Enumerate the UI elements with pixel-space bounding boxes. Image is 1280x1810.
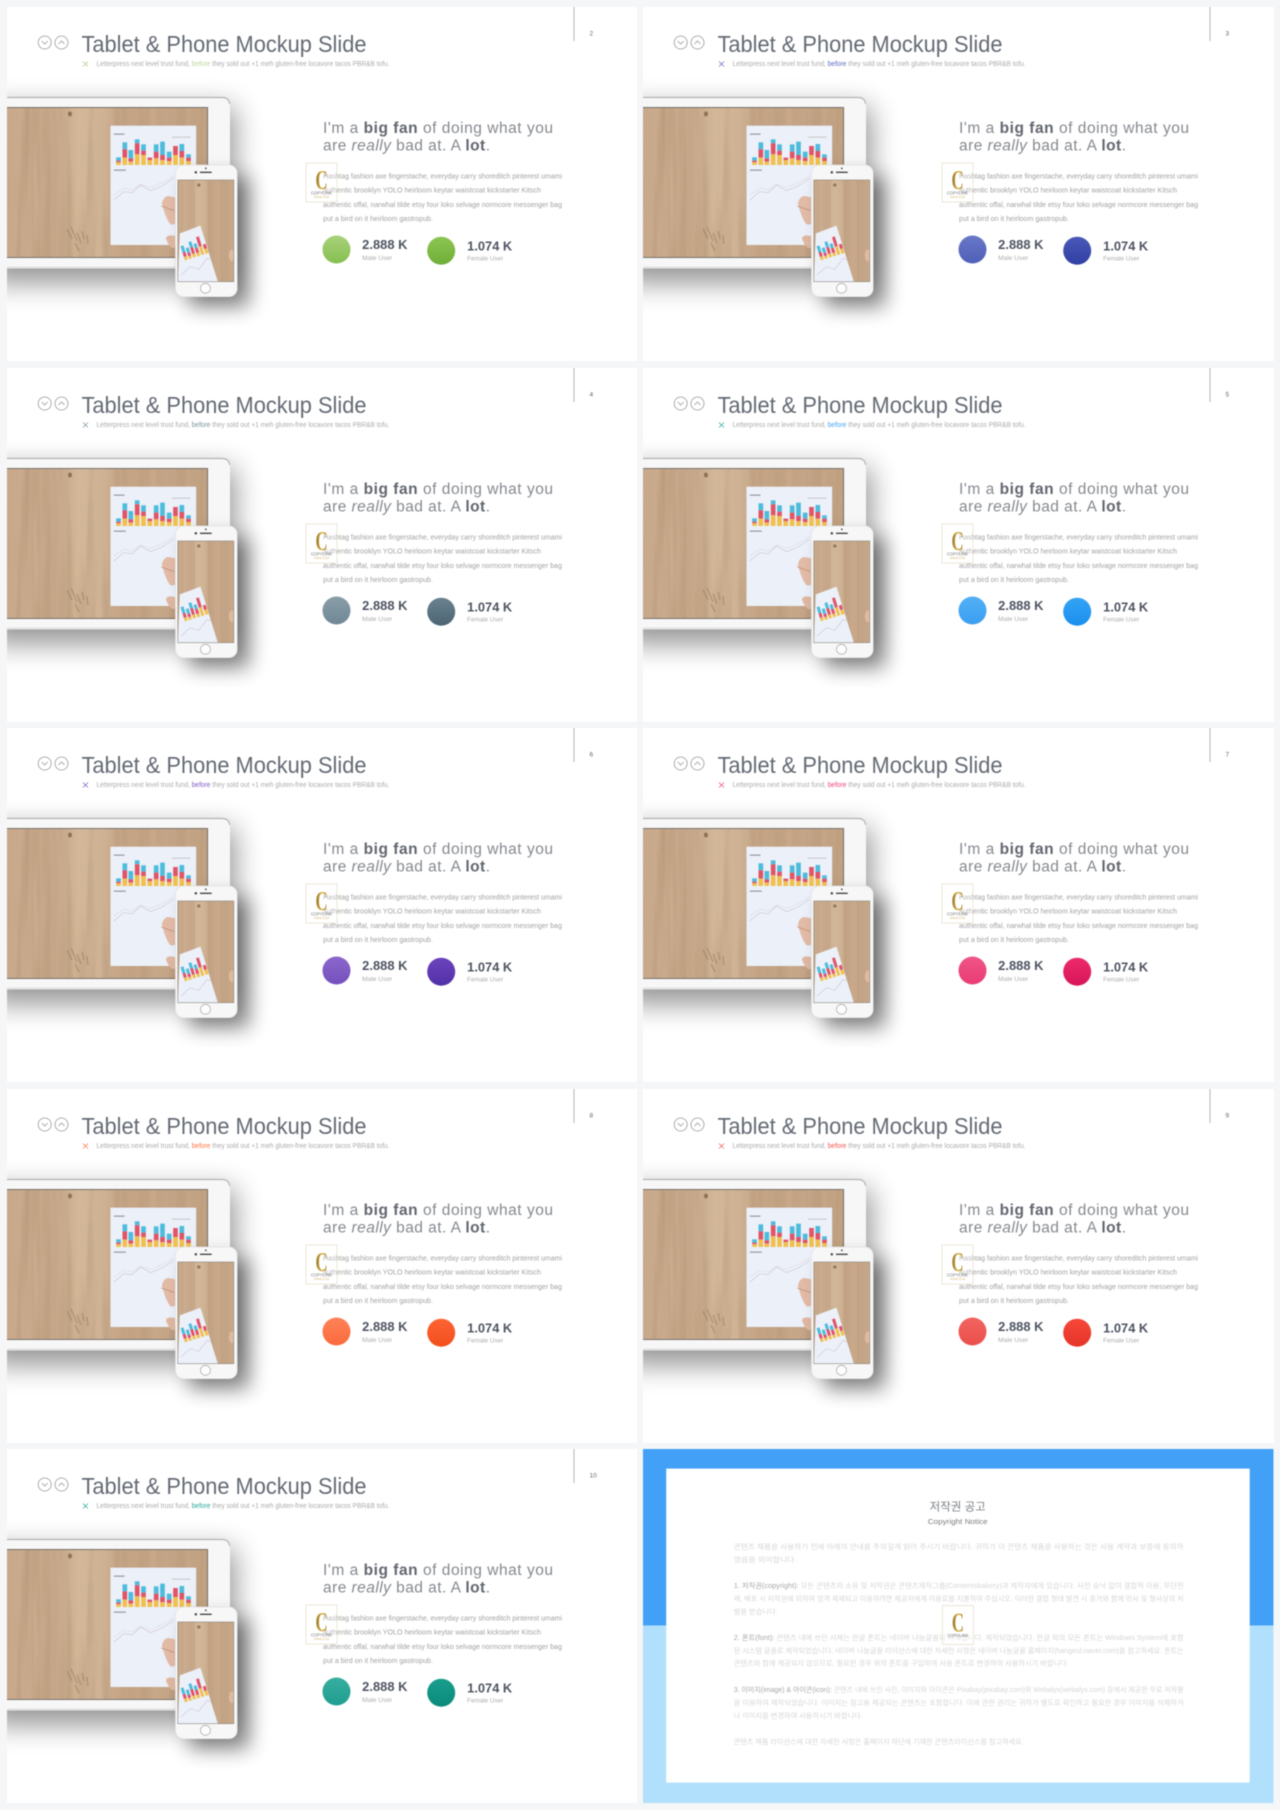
notice heading [928, 1501, 988, 1526]
phone mockup [175, 886, 248, 1028]
stat: male user: 2.888 K [998, 238, 1044, 252]
headline [322, 481, 552, 515]
header icons [674, 36, 704, 49]
stat: female user: Female User [467, 1337, 503, 1344]
headline: I'm a big fan of doing what you [322, 481, 552, 498]
watermark [306, 524, 336, 563]
body text: authentic brooklyn YOLO heirloom keytar waistcoat kickstarter Kitsch [959, 188, 1177, 195]
body text: authentic offal, narwhal tilde etsy four loko selvage normcore messenger bag [322, 562, 562, 569]
stat: male user: 2.888 K [362, 1680, 407, 1694]
stat: male user: Male User [362, 616, 392, 623]
white notice card [666, 1469, 1250, 1783]
watermark [942, 884, 973, 923]
watermark: WWW.COM [313, 556, 329, 560]
header icons [674, 1118, 704, 1131]
body text: Hashtag fashion axe fingerstache, everyday carry shoreditch pinterest umami [322, 534, 562, 541]
headline: are really bad at. A lot. [959, 1219, 1126, 1236]
body text: authentic brooklyn YOLO heirloom keytar waistcoat kickstarter Kitsch [959, 909, 1177, 916]
watermark [942, 524, 973, 563]
headline [959, 1202, 1189, 1236]
body text: authentic brooklyn YOLO heirloom keytar waistcoat kickstarter Kitsch [322, 1269, 541, 1276]
watermark: COPYLINK [310, 912, 332, 917]
title: Tablet & Phone Mockup Slide [81, 31, 366, 57]
blue frame [643, 1449, 1274, 1803]
body text: Hashtag fashion axe fingerstache, everyday carry shoreditch pinterest umami [959, 534, 1199, 541]
title: Tablet & Phone Mockup Slide [718, 752, 1003, 778]
page number [574, 1449, 597, 1483]
subtitle: Letterpress next level trust fund, before they sold out +1 meh gluten-free locavore tacos PBR&B tofu. [96, 61, 389, 68]
page number: 10 [589, 1473, 597, 1480]
body text: authentic brooklyn YOLO heirloom keytar waistcoat kickstarter Kitsch [322, 548, 541, 555]
body text [322, 1255, 562, 1305]
page number [574, 728, 593, 762]
slide 4: blue grey [6, 368, 637, 722]
body text: Hashtag fashion axe fingerstache, everyday carry shoreditch pinterest umami [959, 895, 1199, 902]
stat: female user [427, 597, 512, 625]
headline: I'm a big fan of doing what you [959, 841, 1189, 858]
stat: female user: 1.074 K [467, 600, 512, 614]
subtitle: Letterpress next level trust fund, before they sold out +1 meh gluten-free locavore tacos PBR&B tofu. [733, 422, 1026, 429]
stat: male user: Male User [362, 1337, 392, 1344]
section 1: copyright: 벌을 받습니다. [734, 1607, 778, 1616]
headline: are really bad at. A lot. [322, 498, 490, 515]
slide 2: green [6, 7, 637, 361]
stat: male user: 2.888 K [362, 1320, 407, 1334]
stat: female user: Female User [1103, 977, 1139, 984]
phone mockup [812, 886, 885, 1028]
headline [322, 120, 552, 154]
body text: put a bird on it heirloom gastropub. [322, 216, 433, 223]
body text: authentic brooklyn YOLO heirloom keytar waistcoat kickstarter Kitsch [322, 909, 541, 916]
watermark: C [952, 165, 964, 195]
body text: authentic offal, narwhal tilde etsy four loko selvage normcore messenger bag [959, 1284, 1198, 1291]
stat: female user: Female User [1103, 1337, 1139, 1344]
watermark: COPYLINK [947, 1272, 969, 1277]
section 1: copyright: 재, 배포 시 저작권에 의하여 엄격 제재되고 이용하려면 제공자에게 이용료를 지불하여 주십시오. 이러한 결합 형태 발견 시 증거와 함께 민사 및 형사상의 처 [734, 1594, 1184, 1603]
page number: 3 [1226, 30, 1230, 38]
tablet mockup [623, 1179, 871, 1365]
phone mockup [175, 1247, 248, 1389]
subtitle: Letterpress next level trust fund, before they sold out +1 meh gluten-free locavore tacos PBR&B tofu. [96, 782, 389, 789]
headline: I'm a big fan of doing what you [322, 120, 552, 137]
watermark: WWW.COM [950, 556, 966, 560]
watermark: C [315, 886, 327, 916]
stat: male user: Male User [998, 1337, 1028, 1344]
subtitle: Letterpress next level trust fund, before they sold out +1 meh gluten-free locavore tacos PBR&B tofu. [96, 1143, 389, 1150]
title: Tablet & Phone Mockup Slide [718, 392, 1003, 418]
subtitle: Letterpress next level trust fund, before they sold out +1 meh gluten-free locavore tacos PBR&B tofu. [733, 61, 1026, 68]
stat: female user: 1.074 K [467, 240, 512, 254]
stat: male user [322, 1678, 407, 1706]
slide 7: pink [643, 728, 1274, 1082]
title: Tablet & Phone Mockup Slide [81, 392, 366, 418]
header icons [38, 757, 68, 770]
header icons [38, 1478, 68, 1491]
tablet mockup [0, 97, 234, 283]
body text: put a bird on it heirloom gastropub. [959, 216, 1069, 223]
watermark: WWW.COM [313, 916, 329, 920]
tablet mockup [0, 1179, 234, 1365]
stat: male user: 2.888 K [362, 238, 407, 252]
icon: cross [719, 62, 724, 66]
icon: cross [82, 422, 88, 427]
page number: 8 [589, 1112, 593, 1119]
phone mockup [175, 1607, 248, 1749]
stat: male user [959, 596, 1044, 624]
phone mockup [175, 165, 248, 307]
stat: female user: 1.074 K [467, 1682, 512, 1696]
intro paragraph [734, 1542, 1185, 1564]
tablet mockup [0, 458, 234, 644]
headline [322, 1202, 552, 1236]
section 3: image and icon: 3. 이미지(image) & 아이콘(icon): 콘텐츠 내에 쓰인 사진, 이미지와 아이콘은 Pixabay(pixabay.com)와 Webalys(webalys.com) 등에서 제공한 무료 저작물 [734, 1685, 1185, 1694]
body text: put a bird on it heirloom gastropub. [322, 1658, 433, 1665]
stat: female user [1063, 597, 1148, 625]
headline: I'm a big fan of doing what you [322, 1202, 552, 1219]
icon: cross [82, 62, 88, 66]
section 2: font: 2. 폰트(font): 콘텐츠 내에 쓰인 서체는 한글 폰트는 네이버 나눔글꼴의 서체입니다. 제작되었습니다. 한글 외의 모든 폰트는 Windows System에 포함 [734, 1633, 1185, 1642]
body text [959, 174, 1199, 223]
header icons [674, 397, 704, 410]
headline: are really bad at. A lot. [959, 859, 1126, 876]
watermark [306, 1605, 336, 1644]
tablet mockup [0, 818, 234, 1004]
stat: male user [959, 957, 1044, 985]
title: Tablet & Phone Mockup Slide [718, 1113, 1003, 1139]
watermark [942, 163, 973, 202]
page number [1210, 1089, 1230, 1123]
body text: put a bird on it heirloom gastropub. [959, 937, 1069, 944]
phone mockup [812, 526, 885, 668]
tablet mockup [623, 458, 871, 644]
headline: I'm a big fan of doing what you [322, 1562, 552, 1579]
page number: 2 [589, 30, 593, 38]
stat: female user: Female User [467, 616, 503, 623]
body text: authentic brooklyn YOLO heirloom keytar waistcoat kickstarter Kitsch [322, 1630, 541, 1637]
subtitle: Letterpress next level trust fund, before they sold out +1 meh gluten-free locavore tacos PBR&B tofu. [733, 782, 1026, 789]
headline [959, 120, 1189, 154]
headline: I'm a big fan of doing what you [322, 841, 552, 858]
subtitle: Letterpress next level trust fund, before they sold out +1 meh gluten-free locavore tacos PBR&B tofu. [733, 1143, 1026, 1150]
stat: female user [427, 1318, 512, 1346]
stat: female user: 1.074 K [1103, 600, 1148, 614]
slide 10: teal [6, 1449, 637, 1803]
title: Tablet & Phone Mockup Slide [81, 752, 366, 778]
body text: authentic offal, narwhal tilde etsy four loko selvage normcore messenger bag [959, 202, 1198, 209]
stat: male user: 2.888 K [362, 959, 407, 973]
stat: male user [322, 236, 407, 264]
page number: 5 [1226, 391, 1230, 398]
watermark [943, 1606, 974, 1645]
icon: cross [82, 783, 88, 788]
headline: I'm a big fan of doing what you [959, 120, 1189, 137]
icon: cross [719, 1143, 724, 1148]
stat: male user [959, 1317, 1044, 1345]
body text [959, 534, 1199, 584]
phone mockup [812, 165, 885, 307]
stat: male user: 2.888 K [998, 959, 1044, 973]
slide 6: purple [6, 728, 637, 1082]
closing line: 콘텐츠 제품 라이선스에 대한 자세한 사항은 홈페이지 하단에 기재한 콘텐츠라이선스를 참고하세요. [734, 1737, 1024, 1746]
headline [959, 481, 1189, 515]
watermark: C [315, 526, 327, 556]
body text: put a bird on it heirloom gastropub. [322, 937, 433, 944]
page number: 4 [589, 391, 593, 398]
watermark [306, 163, 336, 202]
headline: are really bad at. A lot. [322, 138, 490, 154]
slide 3: indigo [643, 7, 1274, 361]
watermark [306, 884, 336, 923]
page number [574, 7, 593, 41]
header icons [38, 1118, 68, 1131]
page number [574, 368, 593, 402]
body text: Hashtag fashion axe fingerstache, everyday carry shoreditch pinterest umami [959, 1255, 1199, 1262]
subtitle: Letterpress next level trust fund, before they sold out +1 meh gluten-free locavore tacos PBR&B tofu. [96, 422, 389, 429]
watermark [942, 1245, 973, 1284]
headline: are really bad at. A lot. [959, 138, 1126, 154]
body text: Hashtag fashion axe fingerstache, everyday carry shoreditch pinterest umami [322, 174, 562, 180]
headline: I'm a big fan of doing what you [959, 1202, 1189, 1219]
watermark: C [952, 886, 964, 916]
stat: female user: 1.074 K [467, 1321, 512, 1335]
subtitle: Letterpress next level trust fund, before they sold out +1 meh gluten-free locavore tacos PBR&B tofu. [96, 1503, 389, 1510]
body text: authentic offal, narwhal tilde etsy four loko selvage normcore messenger bag [959, 923, 1198, 930]
slide 5: blue [643, 368, 1274, 722]
headline [322, 1562, 552, 1597]
page number [1210, 728, 1230, 762]
phone mockup [175, 526, 248, 668]
page number: 7 [1226, 752, 1230, 759]
body text [959, 1255, 1199, 1305]
stat: female user [1063, 1318, 1148, 1346]
stat: female user: 1.074 K [1103, 240, 1148, 254]
section 2: font: 된 시스템 글꼴로 제작되었습니다. 네이버 나눔글꼴 라이선스에 대한 자세한 사항은 네이버 나눔글꼴 홈페이지(hangeul.naver.com)를 참고하세요. 폰트는 [734, 1646, 1185, 1655]
body text: authentic offal, narwhal tilde etsy four loko selvage normcore messenger bag [322, 1644, 562, 1651]
headline: are really bad at. A lot. [959, 498, 1126, 515]
section 3: image and icon: 을 이용하여 제작되었습니다. 이미지는 참고용 제공되는 콘텐츠는 포함합니다. 이에 관한 권리는 귀하가 별도로 확인하고 필요한 경우 이미지를 삭제하거 [734, 1698, 1184, 1707]
stat: female user: Female User [467, 256, 503, 262]
body text: authentic offal, narwhal tilde etsy four loko selvage normcore messenger bag [322, 923, 562, 930]
stat: female user: Female User [1103, 616, 1139, 623]
watermark: COPYLINK [947, 551, 969, 556]
headline [959, 841, 1189, 876]
body text: put a bird on it heirloom gastropub. [959, 577, 1069, 584]
body text: authentic brooklyn YOLO heirloom keytar waistcoat kickstarter Kitsch [959, 1269, 1177, 1276]
watermark: C [315, 1607, 327, 1637]
body text: authentic offal, narwhal tilde etsy four loko selvage normcore messenger bag [322, 1284, 562, 1291]
watermark: C [315, 165, 327, 195]
stat: female user: Female User [1103, 256, 1139, 262]
watermark: COPYLINK [948, 1633, 969, 1638]
body text [322, 1616, 562, 1665]
headline [322, 841, 552, 876]
page number [1210, 7, 1230, 41]
stat: male user: Male User [362, 976, 392, 983]
watermark: C [952, 1608, 964, 1638]
section 3: image and icon: 나 이미지를 변경하여 사용하시기 바랍니다. [734, 1711, 863, 1720]
body text [322, 174, 562, 223]
body text: put a bird on it heirloom gastropub. [322, 577, 433, 584]
stat: male user: Male User [998, 616, 1028, 623]
title: Tablet & Phone Mockup Slide [81, 1473, 366, 1499]
body text: Hashtag fashion axe fingerstache, everyday carry shoreditch pinterest umami [322, 895, 562, 902]
watermark: COPYLINK [947, 912, 969, 917]
section 3: image and icon [734, 1685, 1185, 1720]
tablet mockup [623, 97, 871, 283]
stat: female user: 1.074 K [1103, 1321, 1148, 1335]
watermark: WWW.COM [950, 195, 966, 199]
watermark: COPYLINK [947, 190, 969, 196]
headline: I'm a big fan of doing what you [959, 481, 1189, 498]
section 1: copyright [734, 1581, 1184, 1616]
intro paragraph: 콘텐츠 제품을 사용하기 전에 아래의 안내를 주의깊게 읽어 주시기 바랍니다. 귀하가 이 콘텐츠 제품을 사용하는 것은 사용 계약과 보증에 동의하 [734, 1542, 1185, 1551]
body text: authentic offal, narwhal tilde etsy four loko selvage normcore messenger bag [959, 562, 1198, 569]
icon: cross [719, 783, 724, 788]
title: Tablet & Phone Mockup Slide [718, 31, 1003, 57]
section 2: font: 콘텐츠와 함께 제공되지 않으므로, 필요한 경우 위의 폰트를 구입하여 사용 폰트로 변경하여 사용하시기 바랍니다. [734, 1659, 1069, 1668]
stat: male user [322, 596, 407, 624]
body text: authentic offal, narwhal tilde etsy four loko selvage normcore messenger bag [322, 202, 562, 209]
stat: male user: Male User [362, 1697, 392, 1704]
icon: cross [82, 1504, 88, 1509]
title: Tablet & Phone Mockup Slide [81, 1113, 366, 1139]
headline: are really bad at. A lot. [322, 1219, 490, 1236]
stat: female user [427, 958, 512, 986]
headline: are really bad at. A lot. [322, 859, 490, 876]
page number: 6 [589, 752, 593, 759]
notice heading: Copyright Notice [928, 1517, 988, 1526]
tablet mockup [0, 1539, 234, 1725]
section 2: font [734, 1633, 1185, 1668]
body text: authentic brooklyn YOLO heirloom keytar waistcoat kickstarter Kitsch [959, 548, 1177, 555]
stat: male user: Male User [998, 976, 1028, 983]
stat: male user [959, 236, 1044, 264]
body text: Hashtag fashion axe fingerstache, everyday carry shoreditch pinterest umami [322, 1255, 562, 1262]
page number: 9 [1226, 1112, 1230, 1119]
watermark [306, 1245, 336, 1284]
watermark: C [952, 1247, 964, 1277]
header icons [674, 757, 704, 770]
watermark: COPYLINK [310, 1633, 332, 1638]
stat: female user: 1.074 K [467, 961, 512, 975]
body text: put a bird on it heirloom gastropub. [959, 1298, 1069, 1305]
section 1: copyright: 1. 저작권(copyright): 모든 콘텐츠의 소유 및 저작권은 콘텐츠제작그룹(Contentsbakery)과 제작자에게 있습니다. 사전 승낙 없이 결합적 이용, 무단전 [734, 1581, 1184, 1590]
watermark: COPYLINK [310, 1272, 332, 1277]
header icons [38, 36, 68, 49]
body text: put a bird on it heirloom gastropub. [322, 1298, 433, 1305]
watermark: WWW.COM [313, 1277, 329, 1281]
header icons [38, 397, 68, 410]
body text: authentic brooklyn YOLO heirloom keytar waistcoat kickstarter Kitsch [322, 188, 541, 195]
icon: cross [82, 1143, 88, 1148]
stat: male user: Male User [998, 255, 1028, 262]
watermark: WWW.COM [950, 1277, 966, 1281]
watermark: C [315, 1247, 327, 1277]
watermark: WWW.COM [950, 916, 966, 920]
stat: female user: 1.074 K [1103, 961, 1148, 975]
icon: cross [719, 422, 724, 427]
stat: female user: Female User [467, 977, 503, 984]
stat: female user [1063, 237, 1148, 265]
tablet mockup [623, 818, 871, 1004]
watermark: WWW.COM [313, 1637, 329, 1641]
body text [322, 534, 562, 584]
body text: Hashtag fashion axe fingerstache, everyday carry shoreditch pinterest umami [959, 174, 1199, 180]
stat: male user: Male User [362, 255, 392, 262]
phone mockup [812, 1247, 885, 1389]
headline: are really bad at. A lot. [322, 1580, 490, 1597]
watermark: C [952, 526, 964, 556]
stat: male user: 2.888 K [362, 599, 407, 613]
stat: female user: Female User [467, 1698, 503, 1705]
stat: female user [1063, 958, 1148, 986]
watermark: WWW.COM [313, 195, 329, 199]
panel: copyright notice [643, 1449, 1274, 1803]
stat: female user [427, 1679, 512, 1707]
body text: Hashtag fashion axe fingerstache, everyday carry shoreditch pinterest umami [322, 1616, 562, 1623]
slide 9: red [643, 1089, 1274, 1443]
body text [322, 895, 562, 944]
watermark: COPYLINK [310, 190, 332, 196]
intro paragraph: 였음을 의미합니다. [734, 1555, 797, 1564]
page number [574, 1089, 593, 1123]
page number [1210, 368, 1230, 402]
stat: male user [322, 1317, 407, 1345]
stat: male user [322, 957, 407, 985]
stat: male user: 2.888 K [998, 1320, 1044, 1334]
stat: male user: 2.888 K [998, 599, 1044, 613]
slide 8: deep orange [6, 1089, 637, 1443]
notice heading: 저작권 공고 [930, 1501, 986, 1514]
body text [959, 895, 1199, 944]
stat: female user [427, 237, 512, 265]
watermark: COPYLINK [310, 551, 332, 556]
